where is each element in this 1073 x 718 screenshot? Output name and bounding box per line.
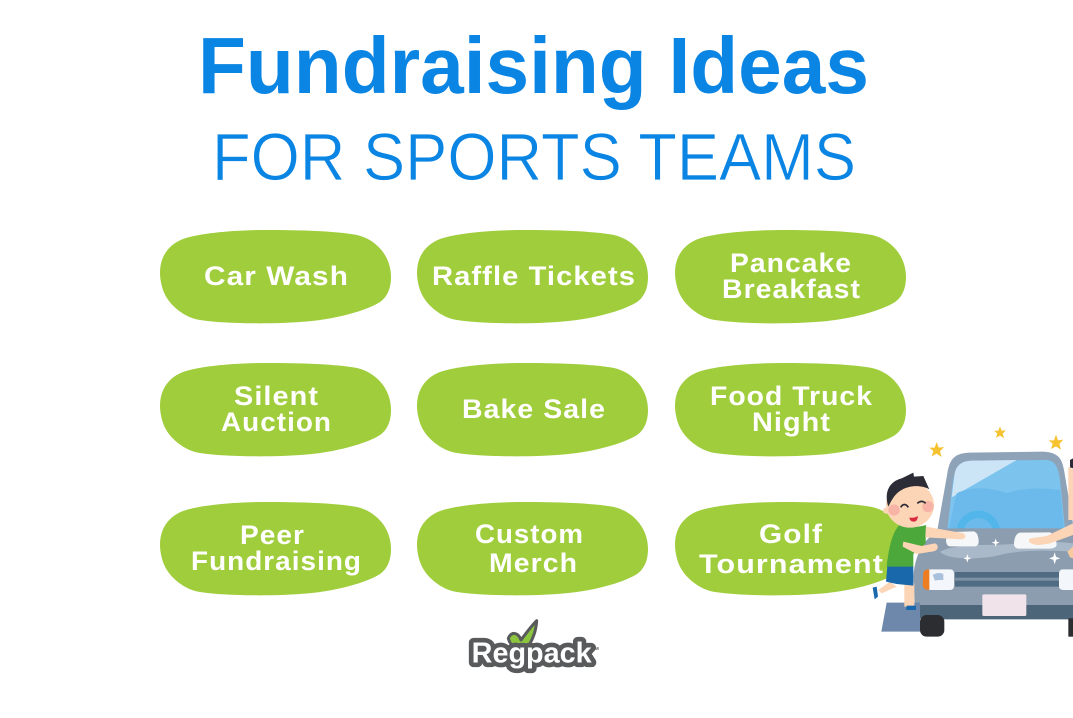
car <box>913 452 1073 637</box>
title: Fundraising Ideas <box>198 21 869 110</box>
button: Pancake Breakfast: Pancake <box>730 248 852 278</box>
button: Custom Merch: Merch <box>489 548 578 578</box>
person on right <box>1029 458 1073 558</box>
button: Food Truck Night: Night <box>752 407 831 437</box>
button: Raffle Tickets: Raffle Tickets <box>432 261 636 291</box>
button: Golf Tournament: Tournament <box>699 549 884 579</box>
button: Car Wash <box>160 230 391 323</box>
button: Bake Sale: Bake Sale <box>462 394 606 424</box>
button: Golf Tournament: Golf <box>759 519 823 549</box>
button: Food Truck Night <box>675 363 906 456</box>
button: Pancake Breakfast: Breakfast <box>722 274 861 304</box>
logo trademark: TM <box>592 646 599 651</box>
button: Pancake Breakfast <box>675 230 906 323</box>
button: Golf Tournament <box>675 502 906 595</box>
button: Peer Fundraising <box>160 502 391 595</box>
logo checkmark <box>508 621 537 655</box>
button: Peer Fundraising: Fundraising <box>191 546 362 576</box>
illustration: car wash <box>873 426 1073 637</box>
logo: Regpack <box>472 621 599 670</box>
icon: step <box>881 603 920 632</box>
button: Car Wash: Car Wash <box>204 261 349 291</box>
button: Silent Auction: Auction <box>221 407 332 437</box>
button: Custom Merch: Custom <box>475 519 584 549</box>
button: Bake Sale <box>417 363 648 456</box>
button: Raffle Tickets <box>417 230 648 323</box>
button: Silent Auction <box>160 363 391 456</box>
button: Custom Merch <box>417 502 648 595</box>
button: Silent Auction: Silent <box>234 381 319 411</box>
button: Peer Fundraising: Peer <box>240 520 305 550</box>
subtitle: FOR SPORTS TEAMS <box>212 120 856 195</box>
button: Food Truck Night: Food Truck <box>710 381 873 411</box>
icon: sparkle stars <box>929 426 1063 457</box>
boy <box>873 473 965 610</box>
logo wordmark: Regpack <box>472 638 592 670</box>
